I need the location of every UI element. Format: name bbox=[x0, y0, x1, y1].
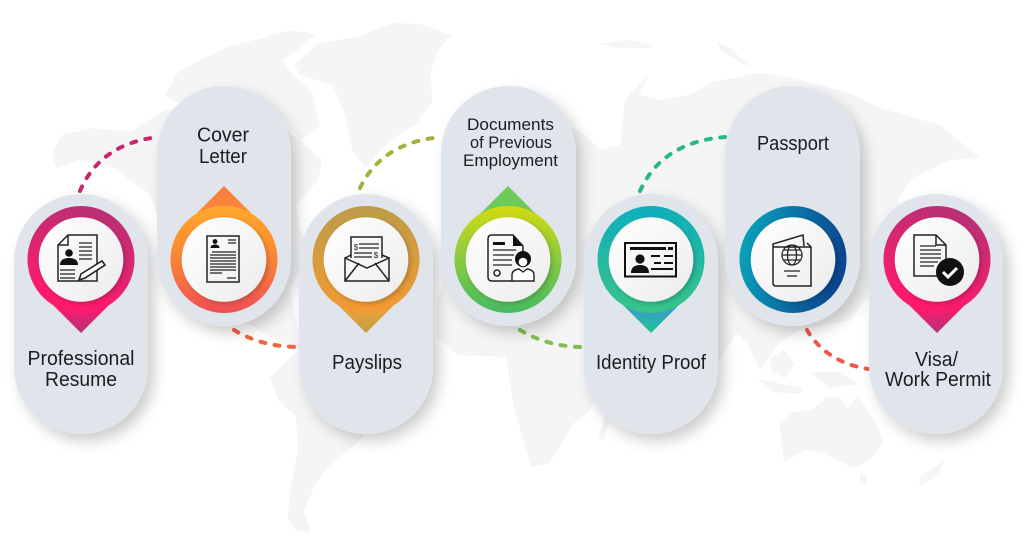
panel: identity proof bbox=[584, 194, 718, 434]
label: cover letter: Letter bbox=[199, 146, 247, 168]
dashed connector: identity proof to passport bbox=[640, 137, 725, 191]
panel: passport bbox=[725, 86, 860, 326]
label: identity proof: Identity Proof bbox=[596, 352, 706, 374]
label: professional resume: Professional bbox=[28, 348, 134, 370]
label: documents of previous employment: Documents bbox=[467, 115, 554, 134]
dashed connector: payslips to documents bbox=[360, 137, 442, 188]
icon: envelope with payslip: $ bbox=[354, 243, 359, 252]
label: professional resume: Resume bbox=[45, 369, 117, 391]
dashed connector: passport to visa bbox=[807, 330, 868, 369]
icon: employment document and person bbox=[488, 235, 534, 281]
icon: cover letter bbox=[207, 236, 239, 282]
panel: visa and work permit bbox=[869, 194, 1003, 434]
dashed connector: resume to cover letter bbox=[80, 137, 158, 191]
icon: envelope with payslip bbox=[345, 237, 389, 281]
dashed connector: documents to identity proof bbox=[520, 330, 584, 347]
icon: resume and pencil bbox=[58, 235, 105, 281]
label: visa and work permit: Visa/ bbox=[915, 349, 958, 371]
dashed connector: cover letter to payslips bbox=[234, 330, 299, 347]
icon: passport bbox=[773, 235, 811, 286]
label: passport: Passport bbox=[757, 133, 829, 155]
icon: id card bbox=[625, 243, 676, 276]
panel: payslips bbox=[299, 194, 433, 434]
panel: cover letter bbox=[157, 86, 291, 326]
label: payslips: Payslips bbox=[332, 352, 402, 374]
panel: documents of previous employment bbox=[441, 86, 576, 326]
panel: professional resume bbox=[14, 194, 148, 434]
label: visa and work permit: Work Permit bbox=[885, 369, 991, 391]
label: documents of previous employment: of Previous bbox=[470, 133, 552, 152]
icon: document with check bbox=[914, 235, 964, 286]
label: cover letter: Cover bbox=[197, 124, 249, 146]
icon: envelope with payslip: $ bbox=[374, 251, 379, 260]
label: documents of previous employment: Employment bbox=[463, 151, 558, 170]
